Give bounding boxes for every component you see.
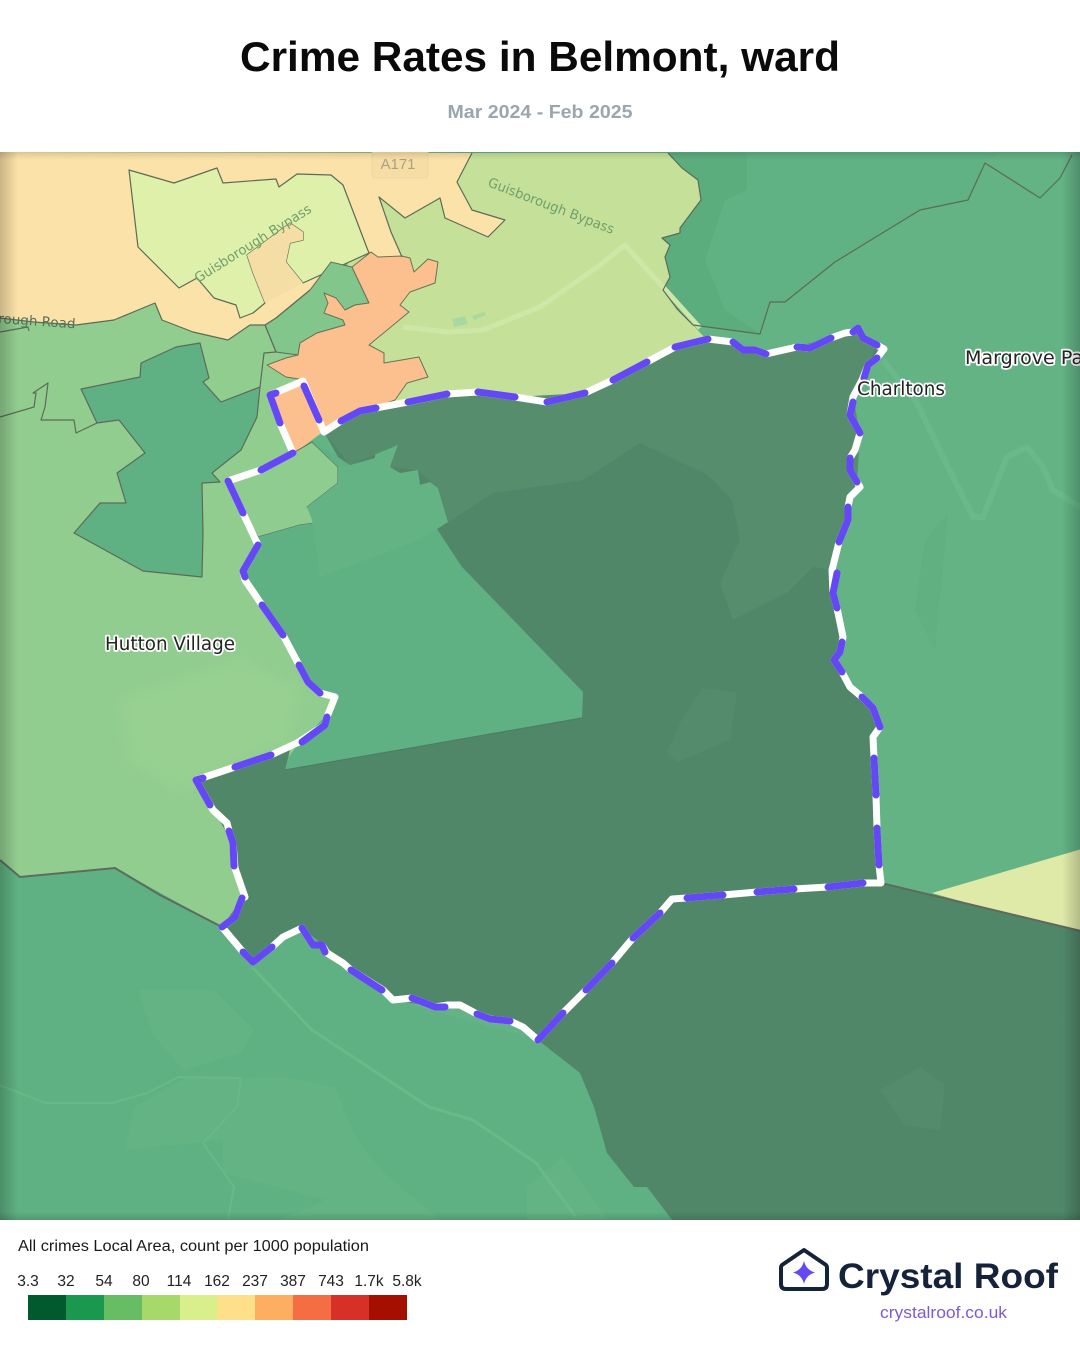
area: south lighter patches <box>125 990 612 1225</box>
boundary: road stub <box>0 327 29 332</box>
area: green wedge <box>265 262 369 355</box>
legend scale labels: 237 <box>242 1273 268 1290</box>
boundary: west village outline <box>0 383 97 433</box>
area: south mid patch <box>228 442 338 537</box>
legend colour bar <box>28 1295 407 1320</box>
area: lime north centre <box>346 153 704 402</box>
area: teal lighter patch <box>307 483 338 524</box>
ward boundary: purple dashes <box>196 328 880 1040</box>
map base: right teal area <box>0 152 1080 1220</box>
area: pale lime neighbourhood <box>129 168 369 318</box>
area: dark low crime ward <box>196 328 881 1040</box>
brand name: Crystal Roof <box>838 1257 1058 1296</box>
road label: Guisborough Bypass west: Guisborough Bypass <box>192 201 315 286</box>
road label: A171 <box>372 150 428 178</box>
choropleth map <box>0 150 1080 1225</box>
icon: house with star <box>781 1250 827 1289</box>
area: pale cream inset <box>247 223 303 303</box>
area: bottom right pale lime <box>932 848 1080 932</box>
area: east patch <box>915 513 948 650</box>
road: south west lane <box>0 1077 241 1220</box>
area: lime water patches <box>452 312 486 327</box>
legend scale labels: 1.7k <box>354 1273 384 1290</box>
title: Crime Rates in Belmont, ward <box>240 33 840 80</box>
road label: Guisborough Bypass north: Guisborough Bypass <box>486 175 616 238</box>
area: lighter upper band of ward <box>375 335 867 491</box>
boundary: small wedge outline <box>260 325 276 387</box>
area: west mid green <box>0 280 345 927</box>
area: north block shading <box>662 153 762 335</box>
road: south valley <box>252 966 544 1174</box>
road highlight: lime <box>403 245 700 332</box>
area: south teal <box>142 882 334 953</box>
boundary: cream lime edge <box>379 153 505 257</box>
area: cream north west <box>0 152 505 340</box>
legend scale labels: 54 <box>95 1273 113 1290</box>
subtitle: date range: Mar 2024 - Feb 2025 <box>448 101 632 122</box>
map edge shading <box>0 152 1080 1220</box>
area: orange small block <box>274 386 320 451</box>
boundary: south east outline <box>881 883 1080 932</box>
area: south east patch <box>880 1067 945 1130</box>
legend scale labels: 114 <box>167 1273 192 1290</box>
legend scale labels: 387 <box>280 1273 306 1290</box>
area: north block teal <box>662 153 1000 334</box>
boundary: ward inner edge <box>285 718 582 770</box>
legend scale labels: 743 <box>318 1273 344 1290</box>
area: ward centre patch <box>667 688 737 762</box>
boundary: south west outline <box>0 860 222 927</box>
road label: Guisborough Road: rough Road <box>0 311 76 332</box>
ward boundary: white line <box>196 328 884 1040</box>
boundary: north-east outline <box>662 153 1072 334</box>
area: south east dark <box>538 883 1080 1225</box>
legend title: All crimes Local Area, count per 1000 population <box>18 1238 369 1255</box>
area: teal interior of ward <box>258 442 340 750</box>
place label: Charltons: Charltons <box>857 379 945 400</box>
road: river valley <box>883 360 1080 517</box>
legend scale labels: 5.8k <box>392 1273 422 1290</box>
legend scale labels: 3.3 <box>17 1273 39 1290</box>
legend <box>17 1238 422 1320</box>
brand url: crystalroof.co.uk <box>880 1304 1008 1322</box>
legend scale labels <box>17 1273 422 1290</box>
legend scale labels: 162 <box>204 1273 230 1290</box>
legend scale labels: 32 <box>57 1273 75 1290</box>
boundary: road outline <box>0 290 310 340</box>
area: Hutton Village lighter patches <box>120 660 300 790</box>
brand logo <box>781 1250 1058 1322</box>
road label: A171: A171 <box>380 156 416 173</box>
area: Hutton teal neighbourhood <box>74 343 260 577</box>
legend scale labels: 80 <box>132 1273 150 1290</box>
place label: Hutton Village: Hutton Village <box>105 634 235 655</box>
area: orange high crime <box>267 252 438 433</box>
